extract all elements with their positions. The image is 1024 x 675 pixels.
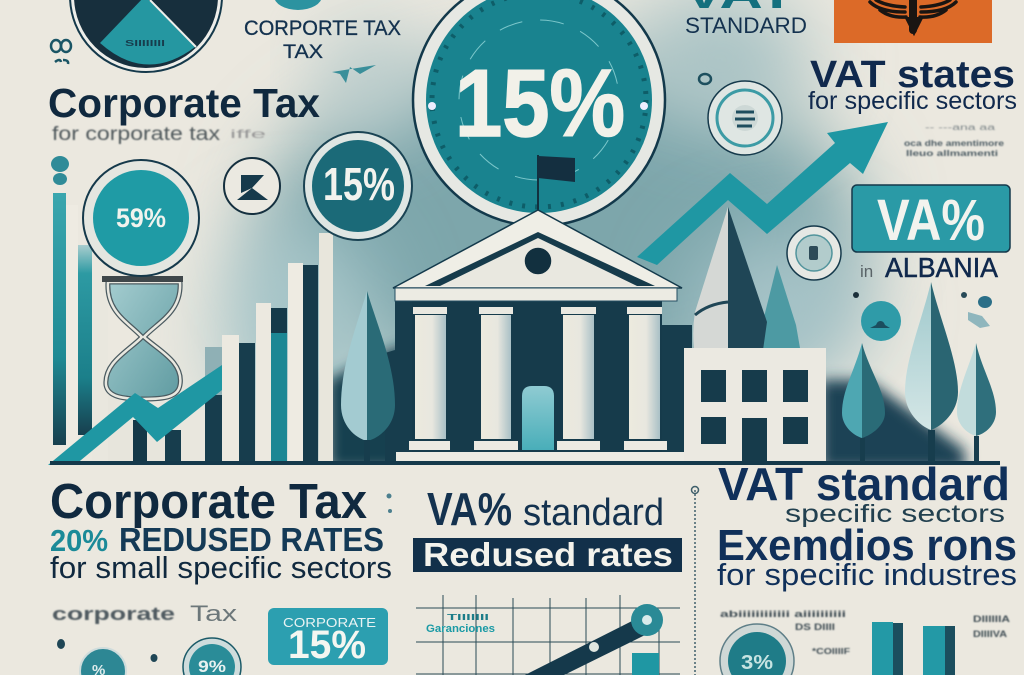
panel: vat standard right: for specific industres	[717, 557, 1017, 592]
door	[522, 386, 554, 450]
callout: VA percent: VA%	[877, 188, 985, 253]
blurred caption lines: DS DIIII	[795, 622, 835, 632]
panel: vat standard right: specific sectors	[785, 500, 1005, 528]
vertical dotted divider	[692, 486, 698, 675]
blurred caption lines: DIIIIIIA	[973, 614, 1011, 624]
badge: small teal 9 percent	[183, 638, 241, 675]
subheading: for corporate tax: iffe	[230, 127, 267, 141]
pediment	[393, 210, 682, 288]
line chart grid	[416, 595, 680, 675]
blurred caption lines	[720, 609, 1011, 656]
small icon: left marks	[51, 40, 71, 64]
right rising arrow	[637, 122, 888, 265]
chart label	[426, 613, 495, 635]
panel: corporate tax bottom: 20%	[50, 523, 108, 558]
icon: zigzag badge	[224, 158, 280, 214]
decorative teal blob top	[274, 0, 322, 10]
tree left	[341, 291, 395, 462]
heading: vat states: VAT states	[810, 54, 1015, 96]
chart label: TIIIIIII	[447, 613, 489, 622]
icon: small coin	[787, 226, 841, 280]
tree A	[842, 343, 885, 462]
panel: vat standard right: Exemdios rons	[717, 521, 1017, 570]
annex building	[684, 348, 826, 461]
small blurred note: -- ---ana aa	[925, 123, 996, 132]
heading: corporate tax top small	[244, 17, 401, 63]
right trees	[842, 282, 996, 462]
label: in Albania: in	[860, 262, 873, 281]
badge: 59 percent	[83, 160, 199, 276]
icon: teal pin	[51, 156, 69, 185]
small blurred note: oca dhe amentimore	[904, 139, 1005, 148]
small dot	[699, 74, 711, 84]
bar chart bottom right	[872, 622, 955, 675]
main building: bank	[393, 210, 684, 462]
tree B	[905, 282, 958, 462]
heading: vat states: for specific sectors	[808, 87, 1017, 115]
badge: small teal left	[80, 648, 126, 675]
chart label: Garanciones	[426, 623, 495, 635]
blurred caption lines: DIIIIVA	[973, 629, 1008, 639]
column 2	[474, 307, 518, 450]
small specks	[57, 639, 158, 662]
column 3	[557, 307, 600, 450]
panel: va standard: standard	[523, 492, 664, 534]
panel: vat standard right: VAT standard	[718, 458, 1010, 510]
panel: corporate tax bottom: for small specific sectors	[50, 550, 392, 585]
pie chart	[70, 0, 222, 72]
heading: vat standard top	[684, 0, 807, 38]
albanian flag	[834, 0, 992, 43]
column 1	[409, 307, 450, 450]
icon: coin	[708, 81, 782, 155]
tree C	[957, 343, 996, 462]
ground line	[50, 461, 1000, 465]
chart arm	[525, 604, 663, 675]
label: blurred corporate tax: corporate	[52, 604, 175, 624]
subheading: for corporate tax	[52, 124, 267, 145]
heading: vat standard top: STANDARD	[685, 13, 807, 38]
icon: teal disc	[861, 301, 901, 341]
main badge: 15 percent	[413, 0, 665, 226]
badge: 15 percent	[304, 132, 412, 240]
heading: corporate tax top small: TAX	[283, 42, 323, 63]
small icon: teal mark	[332, 65, 376, 83]
step	[396, 452, 684, 462]
main badge: 15 percent: 15%	[455, 50, 625, 157]
blurred caption lines: *COIIIIF	[812, 647, 850, 656]
panel: va standard	[413, 483, 682, 573]
blurred caption lines: abiiiiiiiiiiii aiiiiiiiiii	[720, 609, 846, 619]
entablature	[395, 288, 677, 301]
heading: corporate tax top small: CORPORTE TAX	[244, 17, 401, 40]
bar chart left	[53, 193, 333, 461]
badge: 15 percent: 15%	[323, 158, 395, 210]
hourglass	[102, 276, 183, 399]
icon: scattered mark	[853, 292, 992, 328]
spires behind annex	[693, 207, 800, 350]
dark hills behind buildings	[328, 300, 965, 470]
callout: corporate 15 percent	[268, 608, 388, 667]
label: blurred corporate tax: Tax	[190, 601, 237, 626]
panel: vat standard right	[717, 458, 1017, 592]
callout: corporate 15 percent: CORPORATE	[283, 615, 376, 630]
flag on building	[537, 155, 575, 210]
badge: 59 percent: 59%	[116, 203, 166, 233]
heading: vat states	[808, 54, 1017, 115]
left rising arrow	[48, 365, 222, 465]
panel: va standard: VA%	[427, 483, 512, 535]
badge: 3 percent: 3%	[741, 652, 773, 674]
subheading: for corporate tax: for corporate tax	[52, 124, 221, 145]
pie label: SIIIIIIII	[125, 39, 165, 48]
panel: corporate tax bottom: Corporate Tax	[50, 475, 367, 529]
label: blurred corporate tax	[52, 601, 237, 626]
heading: corporate tax: Corporate Tax	[48, 80, 320, 126]
chart bar	[632, 653, 659, 675]
icon: eagle	[870, 0, 956, 34]
column 4	[624, 307, 667, 450]
panel: corporate tax bottom	[50, 475, 392, 585]
label: in Albania: ALBANIA	[885, 252, 998, 283]
small blurred note: lleuo allmamenti	[906, 149, 998, 158]
banner: reduced rates: Redused rates	[423, 536, 673, 573]
panel: corporate tax bottom: REDUSED RATES	[119, 521, 384, 558]
callout: corporate 15 percent: 15%	[288, 623, 366, 667]
small dots divider	[386, 494, 392, 513]
small blurred note	[904, 123, 1005, 158]
badge: 3 percent	[720, 624, 794, 675]
